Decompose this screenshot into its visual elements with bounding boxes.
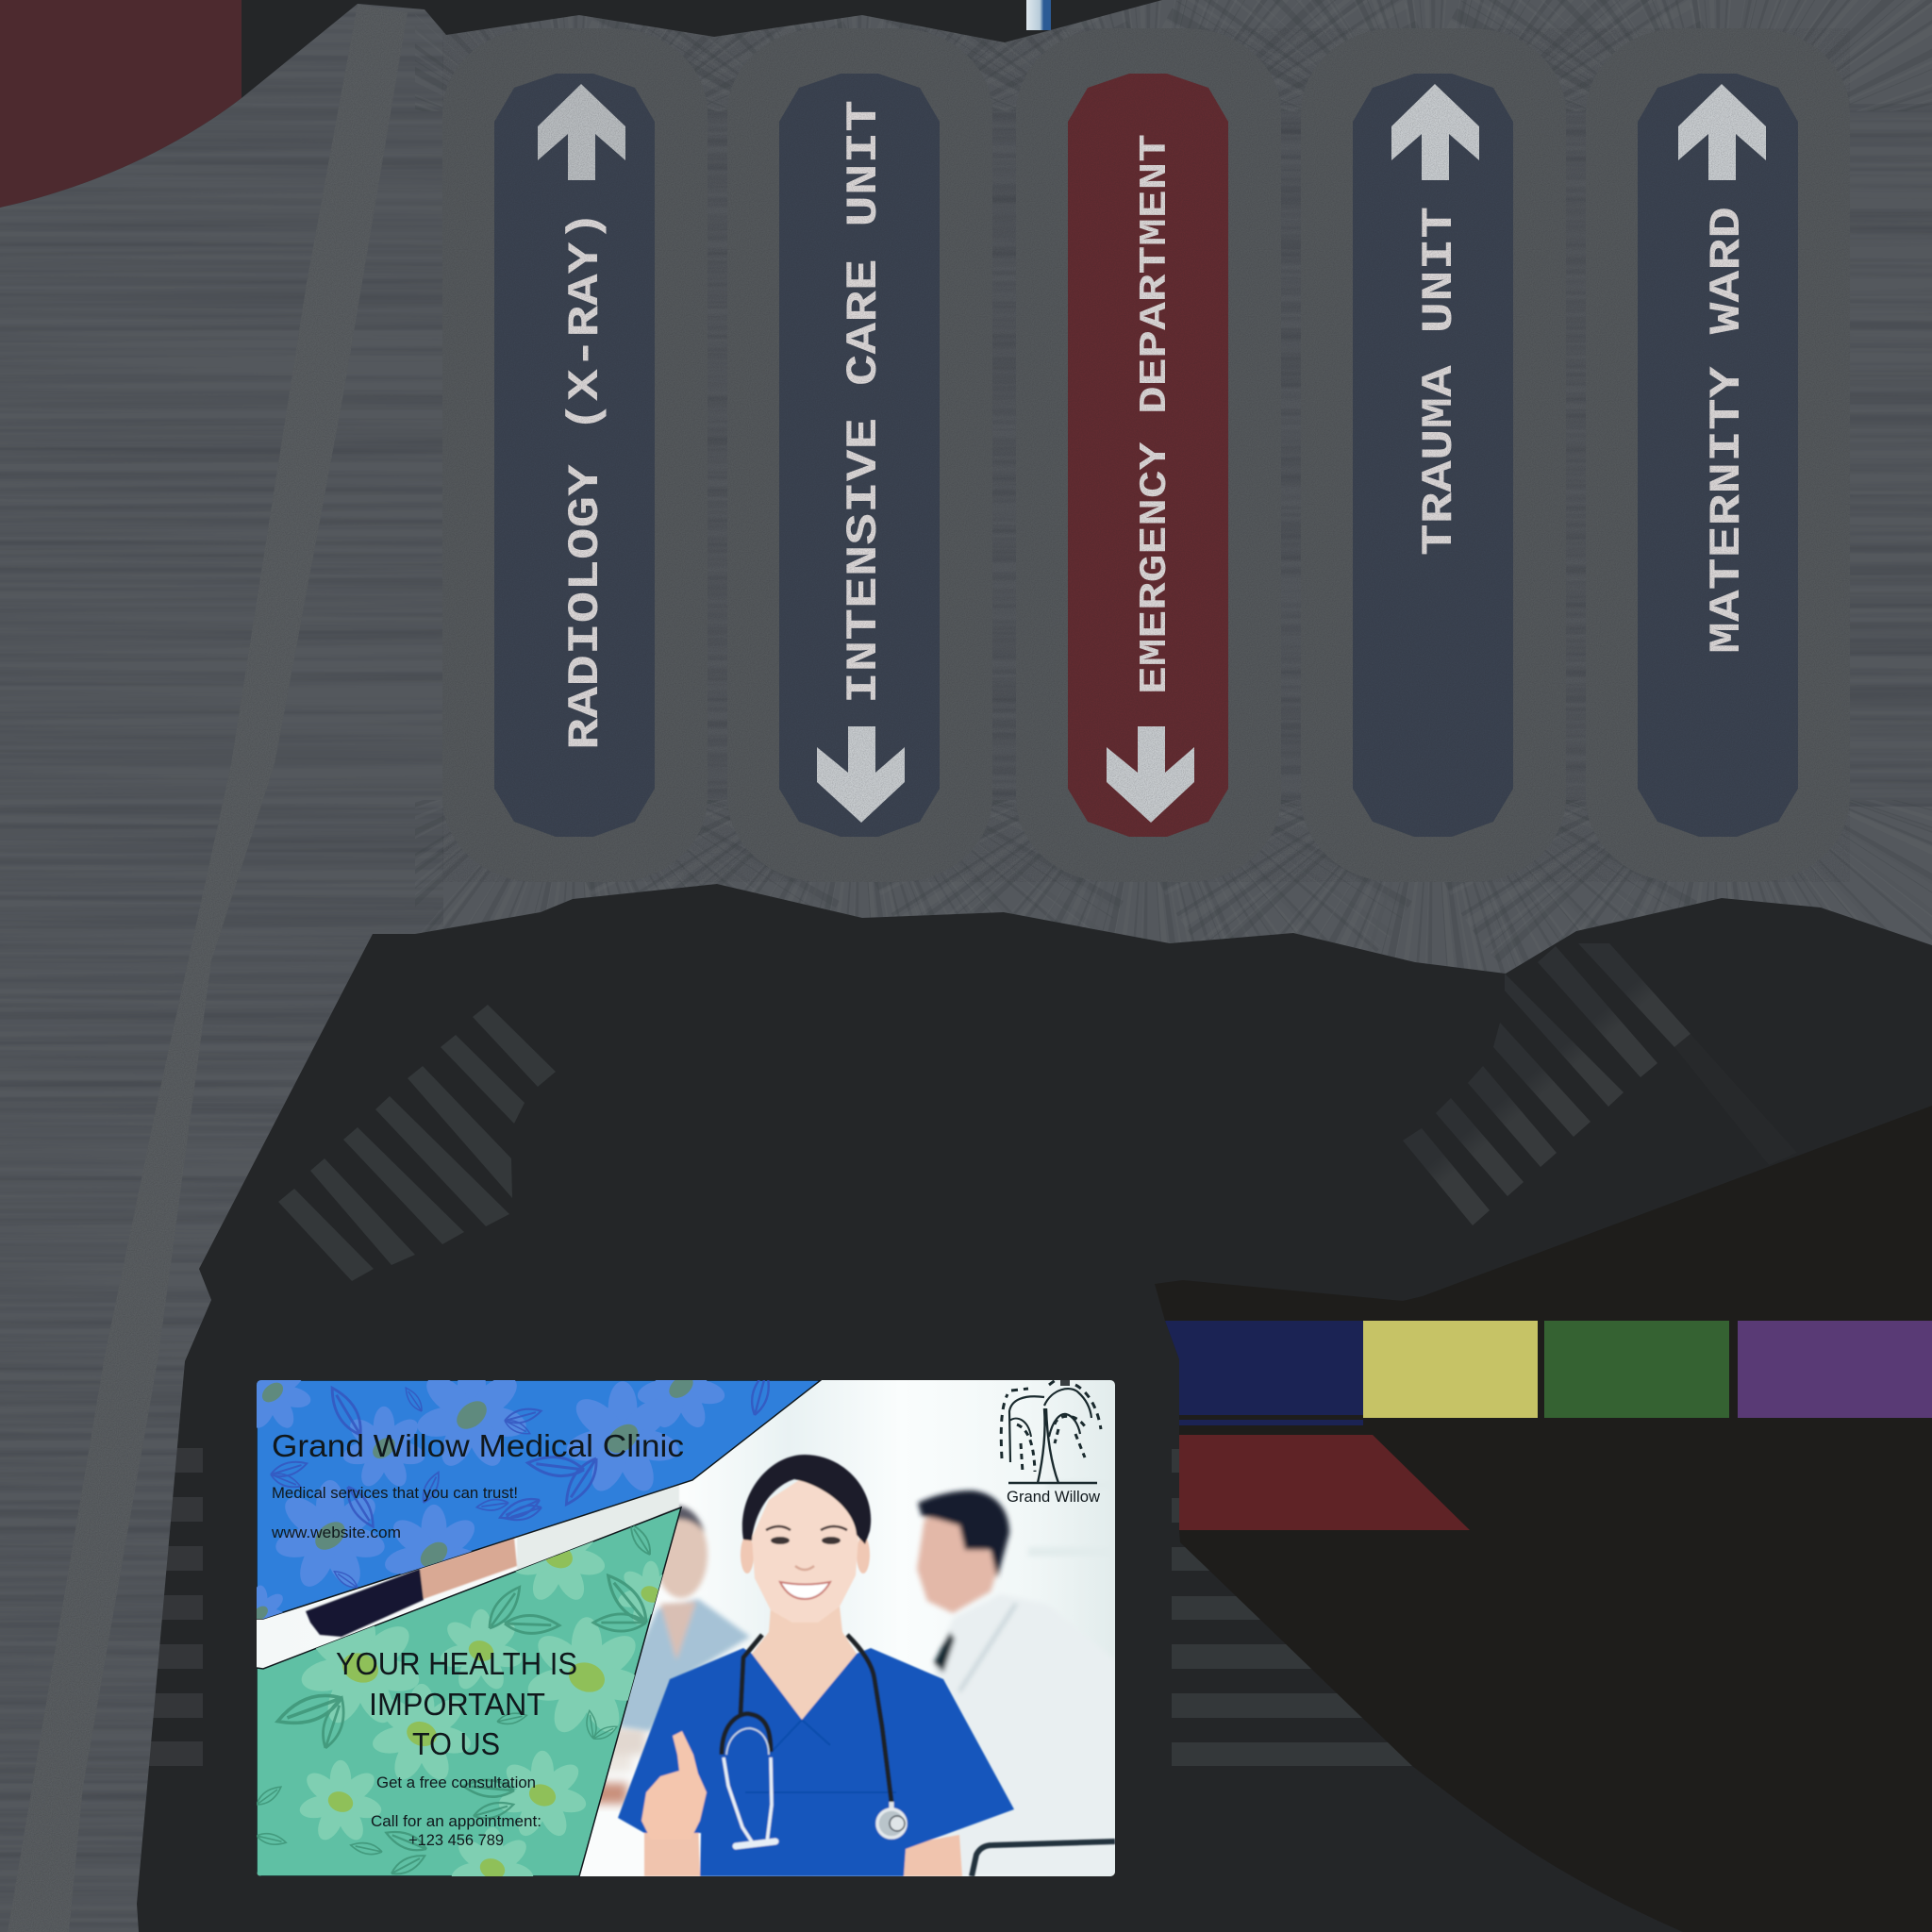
label: INTENSIVE CARE UNIT (840, 100, 889, 704)
blurred man in white coat (917, 1491, 1115, 1876)
appointment lines: +123 456 789 (408, 1831, 504, 1849)
left diagonal floor stripes (278, 1005, 556, 1281)
logo wordmark: Grand Willow (1007, 1488, 1101, 1506)
colour bar: red (1179, 1435, 1470, 1530)
logo: willow tree (1001, 1379, 1101, 1506)
face (752, 1476, 858, 1623)
appointment lines (371, 1812, 541, 1849)
arrow up (1678, 84, 1766, 180)
pill (1353, 74, 1513, 837)
sign backing (442, 28, 708, 882)
colour bar: green (1544, 1321, 1729, 1418)
top-left red wall (0, 0, 242, 208)
right diagonal floor stripes (1403, 943, 1797, 1225)
colour bar: yellow (1363, 1321, 1538, 1418)
hair (742, 1455, 871, 1544)
colour bar: navy (1165, 1321, 1363, 1415)
pill (494, 74, 655, 837)
health headline (336, 1646, 577, 1761)
blurred patient hair and face (306, 1481, 679, 1637)
nurse (618, 1455, 1014, 1876)
label: TRAUMA UNIT (1415, 207, 1464, 556)
arms (643, 1832, 963, 1876)
label: EMERGENCY DEPARTMENT (1134, 134, 1177, 694)
collar shadow (745, 1720, 896, 1792)
arrow up (1391, 84, 1479, 180)
right stripes beside the advert (1172, 1449, 1417, 1766)
label: RADIOLOGY (X-RAY) (561, 210, 610, 750)
health headline: YOUR HEALTH IS (336, 1646, 577, 1681)
nose (795, 1566, 814, 1570)
horizontal window bars (1028, 1485, 1069, 1557)
blurred colleague woman (618, 1506, 750, 1731)
neck (752, 1607, 857, 1720)
dark floor shape right (1155, 1106, 1932, 1932)
eyebrows and eyes (766, 1526, 847, 1530)
sign panel: emergency (1016, 28, 1281, 882)
pill (1068, 74, 1228, 837)
chair back (972, 1841, 1115, 1876)
sign panel: trauma (1301, 28, 1566, 882)
pill (1638, 74, 1798, 837)
lighter diagonal band (8, 4, 408, 1932)
grain on diagonal band (0, 0, 415, 1932)
label: MATERNITY WARD (1703, 207, 1752, 654)
left wall skirting stripes (113, 1448, 203, 1766)
arrow down (817, 726, 905, 823)
sign panel: maternity (1586, 28, 1850, 882)
fine grain over sign panels (442, 28, 1850, 882)
smile (780, 1582, 830, 1599)
health headline: TO US (412, 1726, 500, 1761)
sign backing (1586, 28, 1850, 882)
colour bar: purple (1738, 1321, 1932, 1418)
tagline: Medical services that you can trust! (272, 1484, 518, 1502)
photo background (257, 1380, 1115, 1876)
blue banner (232, 1342, 821, 1641)
thumbs-up hand (641, 1731, 707, 1840)
sign backing (727, 28, 992, 882)
sign backing (1301, 28, 1566, 882)
sign backing (1016, 28, 1281, 882)
metal post at top (1026, 0, 1051, 30)
website: www.website.com (271, 1524, 401, 1541)
pill (779, 74, 940, 837)
arrow up (538, 84, 625, 180)
arrow down (1107, 726, 1194, 823)
ears (741, 1536, 754, 1574)
green banner (254, 1507, 686, 1911)
sign panel: intensive care (727, 28, 992, 882)
sign panel: radiology (442, 28, 708, 882)
stethoscope (722, 1635, 906, 1846)
appointment lines: Call for an appointment: (371, 1812, 541, 1830)
desk blur bottom-left (590, 1726, 646, 1804)
navy underline (1179, 1420, 1363, 1425)
consultation line: Get a free consultation (376, 1774, 536, 1791)
health headline: IMPORTANT (369, 1687, 545, 1722)
clinic name: Grand Willow Medical Clinic (272, 1428, 684, 1463)
scrubs (618, 1648, 1014, 1876)
advert card (257, 1380, 1115, 1876)
